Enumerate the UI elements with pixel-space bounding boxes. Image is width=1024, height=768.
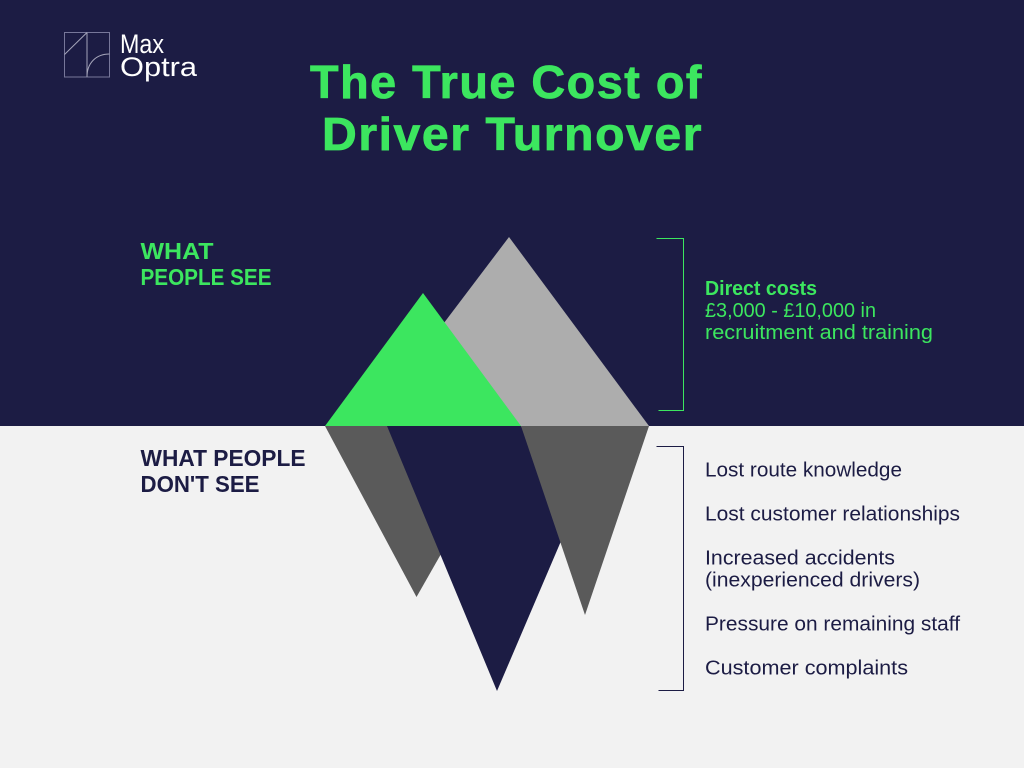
iceberg: left grey underwater shard <box>325 426 445 597</box>
title: Driver Turnover <box>322 108 703 160</box>
text block: direct costs: £3,000 - £10,000 in <box>705 300 876 322</box>
title <box>310 56 703 160</box>
text block: hidden costs list <box>705 460 960 680</box>
text block: hidden costs list: Pressure on remaining staff <box>705 614 960 636</box>
text block: hidden costs list: Increased accidents <box>705 548 895 570</box>
text block: hidden costs list: Lost route knowledge <box>705 460 902 482</box>
iceberg <box>325 237 649 691</box>
heading: what people don't see: DON'T SEE <box>140 471 260 497</box>
text block: hidden costs list: (inexperienced drivers) <box>705 570 920 592</box>
iceberg: grey back peak <box>366 237 649 426</box>
iceberg: navy central underwater shard <box>387 426 570 691</box>
panel: below the waterline <box>0 426 1024 768</box>
logo: MaxOptra: Optra <box>120 52 198 82</box>
bracket: direct costs <box>656 238 684 410</box>
heading: what people see: WHAT <box>140 238 214 264</box>
text block: hidden costs list: Lost customer relationships <box>705 504 960 526</box>
title: The True Cost of <box>310 56 703 108</box>
text block: direct costs: recruitment and training <box>705 322 933 344</box>
heading: what people don't see: WHAT PEOPLE <box>140 445 306 471</box>
heading: what people don't see <box>140 445 306 497</box>
text block: direct costs: Direct costs <box>705 278 817 300</box>
panel: above the waterline <box>0 0 1024 426</box>
text block: direct costs <box>705 278 933 344</box>
heading: what people see <box>140 238 272 290</box>
iceberg: right grey underwater shard <box>521 426 649 615</box>
bracket: hidden costs <box>656 446 684 690</box>
logo: MaxOptra <box>64 29 198 82</box>
logo: MaxOptra: Max <box>120 29 164 59</box>
text block: hidden costs list: Customer complaints <box>705 658 908 680</box>
iceberg: green front peak <box>325 293 521 426</box>
heading: what people see: PEOPLE SEE <box>140 264 272 290</box>
